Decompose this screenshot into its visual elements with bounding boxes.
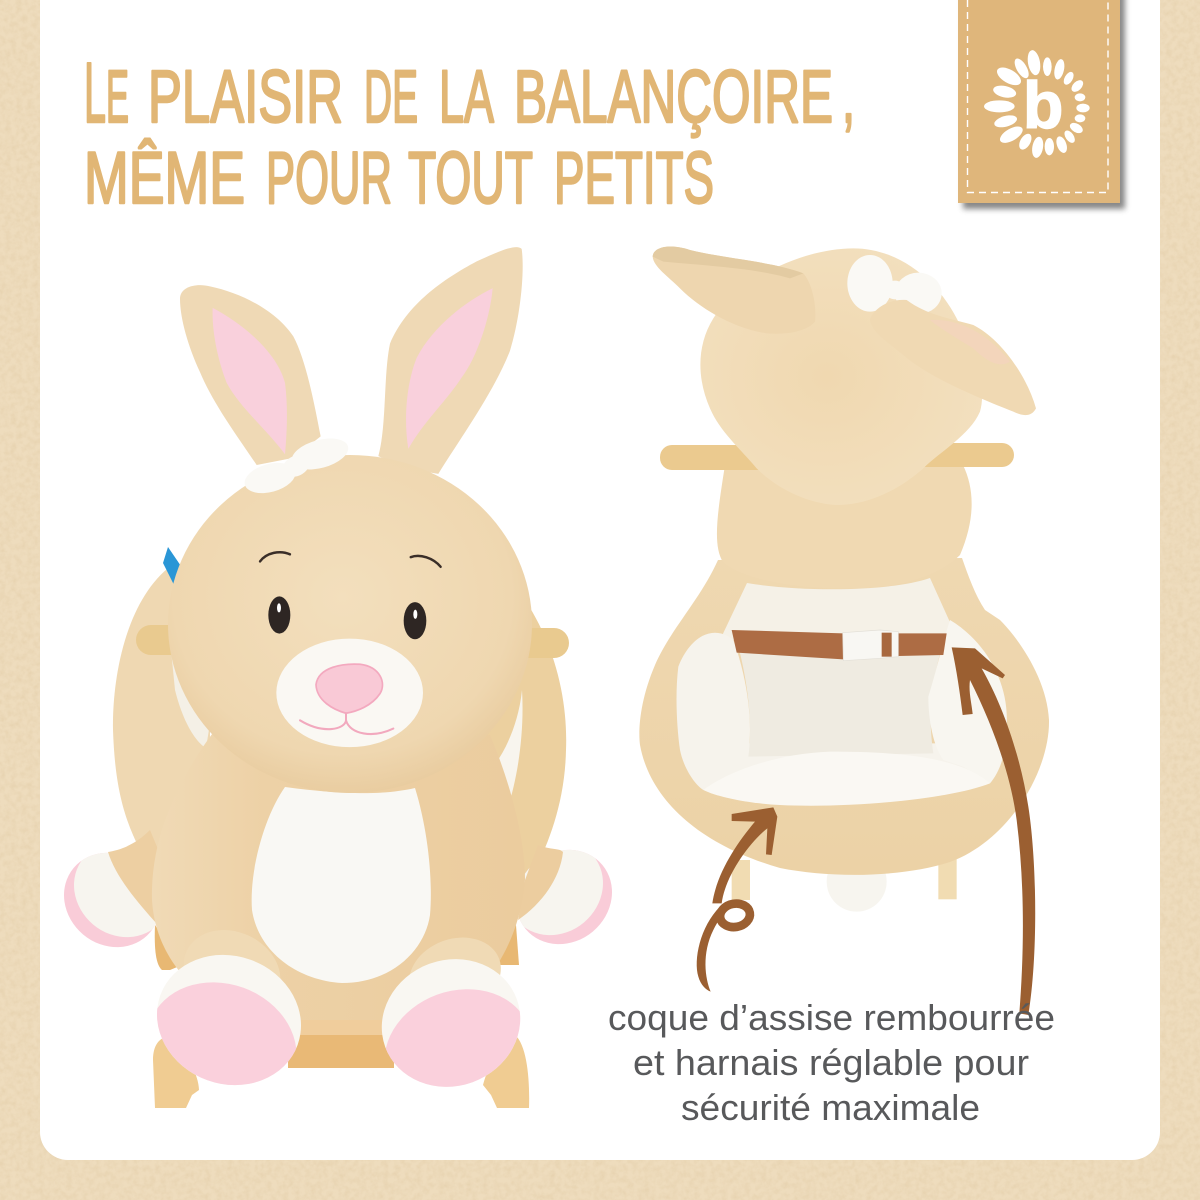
logo: letter b: b (1023, 68, 1063, 142)
white belly (252, 787, 431, 983)
left back foot (64, 830, 157, 948)
title: LA (439, 55, 494, 138)
face (260, 552, 441, 747)
brand tag with logo (958, 0, 1125, 209)
torso (717, 465, 972, 588)
right front foot (382, 959, 520, 1087)
side shell (113, 565, 566, 890)
body (152, 730, 525, 1020)
title: POUR (266, 138, 392, 219)
plush bunny rocker, back view (639, 247, 1049, 912)
title (84, 46, 855, 219)
upper back: head, ears, bow (653, 247, 1036, 505)
caption: sécurité maximale (681, 1087, 980, 1128)
padding details in seat (677, 620, 1007, 806)
wooden rocker base (153, 925, 529, 1108)
title: PETITS (554, 138, 714, 219)
right ear (378, 247, 523, 474)
left ear (180, 285, 321, 465)
title: TOUT (408, 138, 533, 219)
right ear (870, 300, 1036, 415)
bunny upper half: ears (180, 247, 523, 474)
seat shell (639, 558, 1049, 875)
caption (608, 997, 1055, 1128)
caption: et harnais réglable pour (633, 1042, 1029, 1083)
title: DE (364, 55, 418, 138)
blue label (163, 547, 185, 591)
title: , (842, 55, 855, 138)
logo: sunflower petals (984, 49, 1090, 159)
plush bunny rocker, front view (45, 247, 631, 1135)
title: MÊME (84, 138, 245, 219)
head (168, 455, 532, 793)
head from behind (700, 248, 982, 505)
arrow: points to harness (952, 647, 1035, 1015)
white bow (847, 255, 942, 314)
left front foot (157, 954, 301, 1086)
front legs (170, 915, 511, 1029)
arrow: points to padded seat (697, 807, 777, 992)
title: BALANÇOIRE (514, 55, 833, 138)
title: LE (84, 46, 129, 141)
wooden handle (660, 443, 1014, 470)
white bow (241, 433, 352, 498)
wooden legs and tail (732, 852, 957, 912)
title: PLAISIR (148, 55, 343, 138)
caption: coque d’assise rembourrée (608, 997, 1055, 1038)
wooden handles (136, 625, 569, 658)
right back foot (518, 847, 612, 944)
left ear (653, 247, 815, 334)
harness strap and buckle (732, 630, 947, 661)
seat padding (677, 578, 1007, 806)
